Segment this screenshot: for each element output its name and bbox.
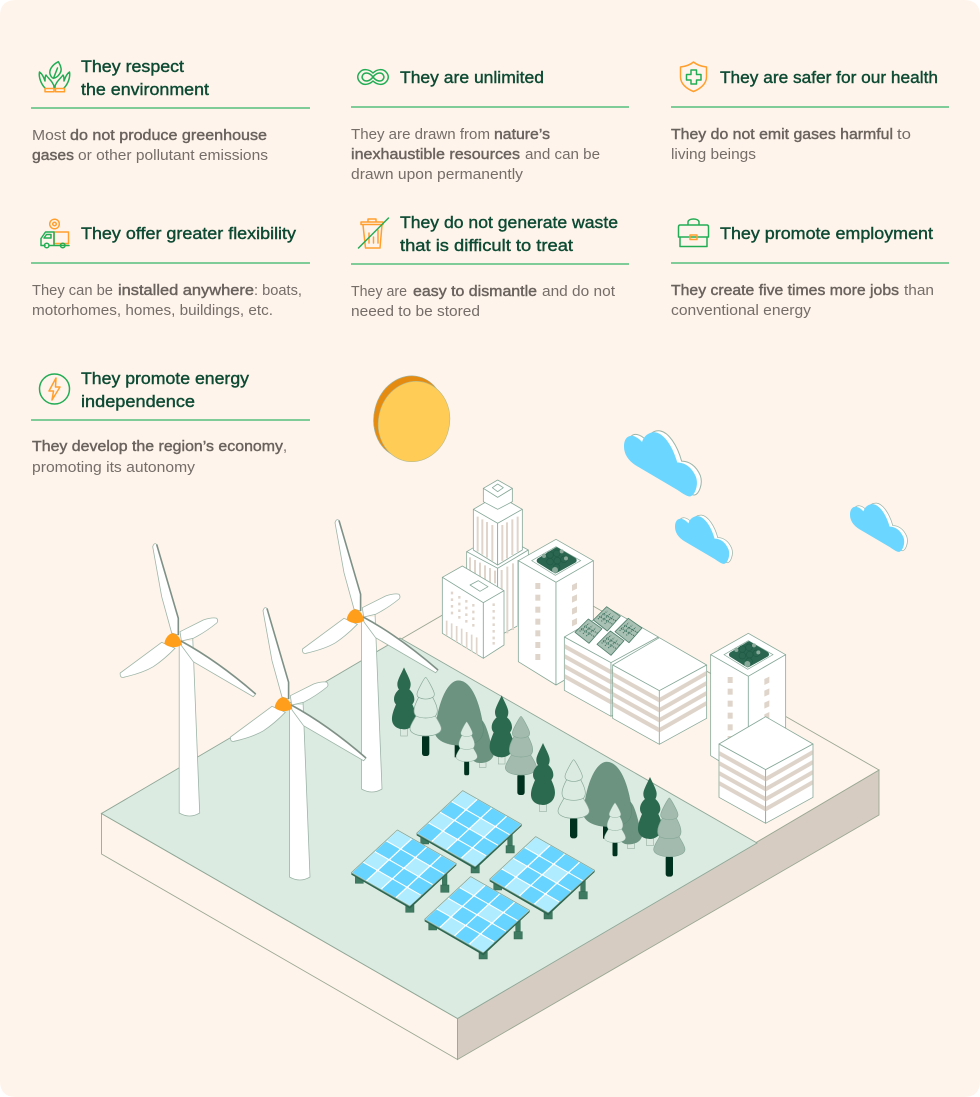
heading <box>81 57 209 99</box>
body text <box>32 439 287 476</box>
heading: They respect <box>81 57 184 76</box>
building: right roof garden tower <box>711 633 786 779</box>
icon: truck and gear <box>41 219 69 248</box>
body text <box>671 283 934 319</box>
body text: motorhomes, homes, buildings, etc. <box>32 303 273 319</box>
building: front striped block <box>719 717 813 823</box>
tree: mid pine <box>654 798 685 877</box>
icon: crossed-out bin <box>358 218 388 248</box>
tree: small light pine <box>456 722 477 775</box>
building: stepped skyscraper <box>467 480 528 637</box>
city buildings <box>442 480 813 823</box>
tree: dark pine <box>638 777 662 846</box>
body text: neeed to be stored <box>351 304 480 320</box>
body text: They create five times more jobs <box>671 283 899 299</box>
tree: rounded <box>583 762 642 849</box>
building: small office <box>442 566 504 658</box>
icon: infinity <box>358 70 388 84</box>
body text <box>671 127 911 163</box>
icon: briefcase <box>678 219 708 246</box>
body text: and can be <box>525 147 600 163</box>
body text: drawn upon permanently <box>351 167 524 183</box>
heading: They promote energy <box>81 369 250 388</box>
solar panel: top <box>417 791 522 873</box>
tree: light pine <box>558 760 589 838</box>
building: roof garden tower <box>518 539 593 685</box>
body text: do not produce greenhouse <box>70 128 267 144</box>
heading: They are safer for our health <box>720 68 938 87</box>
tree: rounded <box>435 681 494 767</box>
heading: They are unlimited <box>400 68 544 87</box>
tree: dark pine <box>490 695 514 764</box>
benefit: respect the environment <box>31 57 310 164</box>
wind turbine: left <box>120 544 256 816</box>
building: roof solar block <box>564 610 658 716</box>
heading <box>400 213 618 255</box>
body text: : boats, <box>254 283 302 299</box>
body text: , <box>283 439 287 455</box>
isometric platform <box>102 567 879 1060</box>
heading: They promote employment <box>720 224 933 243</box>
body text: promoting its autonomy <box>32 460 196 476</box>
wind turbine: front <box>230 608 366 880</box>
icon: hands holding plant <box>39 62 70 92</box>
rooftop solar arrays <box>575 607 642 655</box>
tree: dark pine <box>531 743 555 812</box>
body text <box>32 128 268 164</box>
body text: They are <box>351 284 407 300</box>
cloud: middle <box>675 515 732 564</box>
benefit: flexibility <box>31 219 310 319</box>
body text: easy to dismantle <box>413 284 537 300</box>
body text: Most <box>32 128 66 144</box>
body text: or other pollutant emissions <box>78 148 268 164</box>
benefit: energy independence <box>31 369 310 476</box>
heading: They do not generate waste <box>400 213 618 232</box>
body text <box>351 127 600 183</box>
heading <box>81 369 250 411</box>
heading: that is difficult to treat <box>400 236 573 255</box>
body text: inexhaustible resources <box>351 147 520 163</box>
solar panel: left <box>351 830 456 912</box>
cloud: right <box>850 503 907 552</box>
solar panels <box>351 791 595 959</box>
tree: light pine <box>410 677 441 756</box>
body text <box>351 284 615 320</box>
tree: small light pine <box>604 803 626 856</box>
body text <box>32 283 302 319</box>
building: striped block <box>613 638 707 744</box>
body text: to <box>897 127 911 143</box>
body text: and do not <box>542 284 615 300</box>
heading: independence <box>81 392 195 411</box>
cloud: large <box>624 431 701 496</box>
solar panel: bottom <box>425 877 530 959</box>
benefit: safer for health <box>671 62 949 163</box>
wind turbine: back <box>302 520 438 792</box>
body text: They are drawn from <box>351 127 490 143</box>
benefit: unlimited <box>351 68 629 183</box>
benefit: no waste <box>351 213 629 320</box>
heading: the environment <box>81 80 209 99</box>
tree: dark pine <box>392 667 416 736</box>
solar panel: right <box>490 837 595 919</box>
body text: conventional energy <box>671 303 812 319</box>
body text: They can be <box>32 283 113 299</box>
icon: shield with cross <box>680 62 706 92</box>
body text: than <box>904 283 934 299</box>
icon: lightning bolt in circle <box>40 374 70 404</box>
tree: mid pine <box>505 716 537 795</box>
body text: installed anywhere <box>118 283 254 299</box>
body text: gases <box>32 148 74 164</box>
body text: They develop the region’s economy <box>32 439 284 455</box>
forest <box>392 667 685 877</box>
heading: They offer greater flexibility <box>81 224 297 243</box>
body text: living beings <box>671 147 756 163</box>
body text: nature’s <box>494 127 550 143</box>
benefit: employment <box>671 219 949 319</box>
icon: sun <box>365 368 458 469</box>
body text: They do not emit gases harmful <box>671 127 893 143</box>
